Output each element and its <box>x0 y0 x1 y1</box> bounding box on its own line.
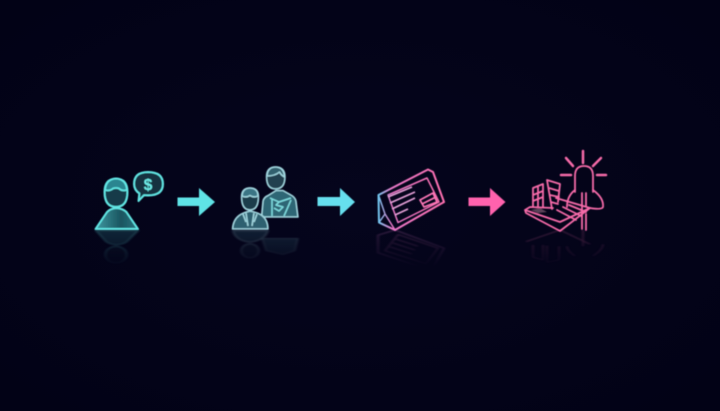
open book <box>270 198 291 216</box>
icon: cheque on stand <box>378 170 444 230</box>
stand side <box>378 195 395 230</box>
dollar sign: $ <box>144 177 153 194</box>
speech bubble <box>134 172 163 201</box>
icon: person with dollar speech bubble <box>96 172 163 229</box>
hand fingers <box>557 205 586 220</box>
building tall <box>547 180 560 209</box>
person head <box>104 178 128 207</box>
cheque card <box>388 178 439 222</box>
hand shadow <box>531 208 547 213</box>
rocket stem <box>582 193 586 230</box>
icon: two people with book <box>232 167 298 229</box>
front person hair <box>242 188 258 197</box>
front person body <box>232 211 268 229</box>
rear person body <box>262 190 298 217</box>
icon: city and rocket on open hand <box>525 151 606 231</box>
front person tie and collar <box>243 213 257 226</box>
idea rays <box>561 151 606 175</box>
person hair <box>105 178 127 190</box>
building small <box>533 184 543 207</box>
open hand <box>525 198 590 231</box>
cheque text lines <box>388 187 415 215</box>
person body <box>96 208 138 229</box>
rear person head <box>266 167 285 189</box>
arrow: teal 2 <box>318 188 355 216</box>
rocket capsule <box>575 166 593 192</box>
rear person hair <box>267 167 284 177</box>
front person head <box>242 188 258 210</box>
stand outline <box>378 170 444 230</box>
cheque amount box <box>420 193 437 207</box>
arrow: pink <box>468 188 506 216</box>
reflections of the icons <box>94 229 604 260</box>
arrow: teal 1 <box>178 188 215 216</box>
rocket fins <box>567 190 603 209</box>
